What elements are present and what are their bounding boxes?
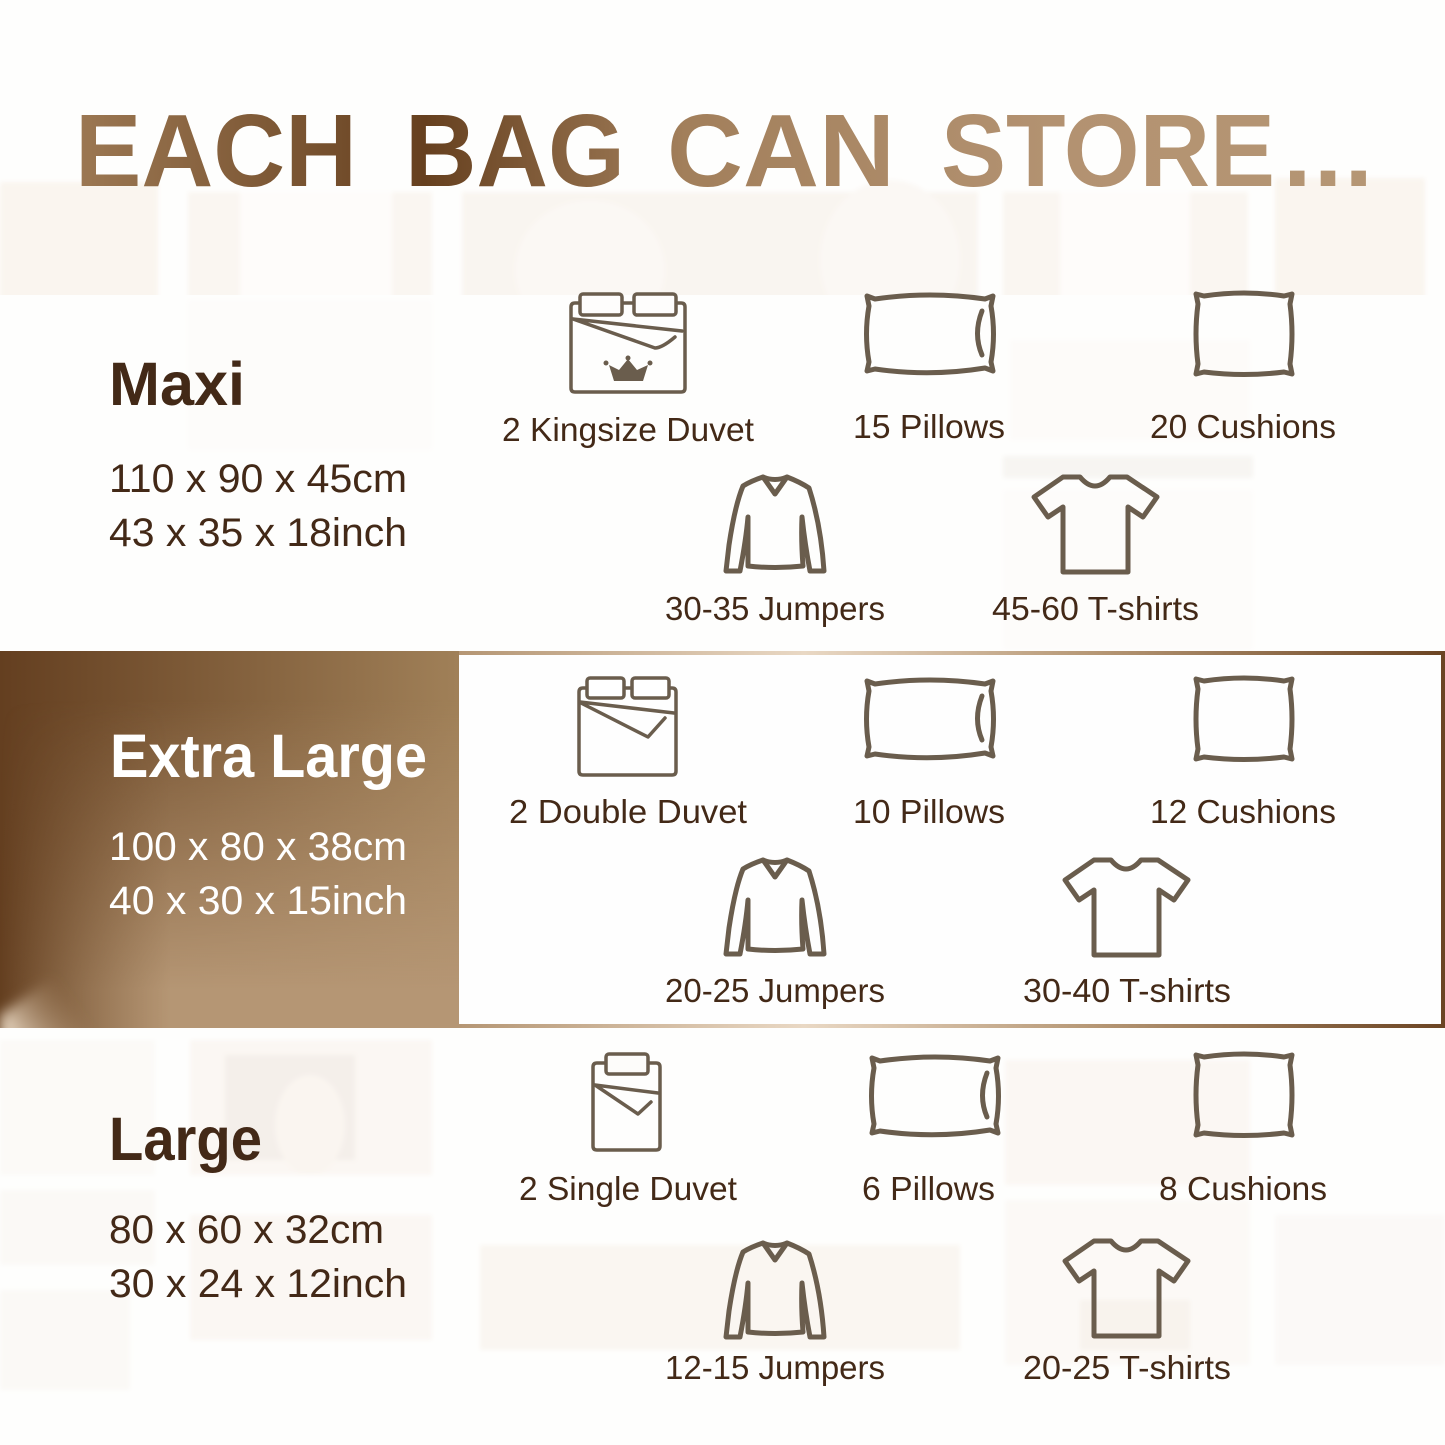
- icon: cushion: [1196, 293, 1292, 374]
- title: BAG: [405, 93, 625, 208]
- icon: jumper: [726, 477, 824, 571]
- heading: Maxi: Maxi: [109, 350, 245, 418]
- dimensions: Large: 80 x 60 x 32cm: [109, 1208, 384, 1252]
- icon: pillow: [866, 295, 994, 373]
- panel: Large size: [109, 1054, 1327, 1386]
- dimensions: Extra Large: 100 x 80 x 38cm: [109, 825, 407, 869]
- label: cushions: 20 Cushions: [1150, 408, 1336, 445]
- label: t-shirts: 45-60 T-shirts: [992, 590, 1199, 627]
- icon: kingsize bed: [571, 294, 685, 392]
- panel: Maxi size: [109, 293, 1336, 627]
- title: [75, 93, 1373, 208]
- label: jumpers: 30-35 Jumpers: [665, 590, 885, 627]
- label: double duvet: 2 Double Duvet: [509, 793, 747, 830]
- label: jumpers: 12-15 Jumpers: [665, 1349, 885, 1386]
- icon: double bed: [579, 678, 676, 775]
- label: kingsize duvet: 2 Kingsize Duvet: [502, 411, 754, 448]
- icon: single bed: [593, 1054, 660, 1150]
- dimensions: Large: 30 x 24 x 12inch: [109, 1262, 407, 1306]
- icon: jumper: [726, 1243, 824, 1337]
- title: CAN: [667, 93, 895, 208]
- label: cushions: 8 Cushions: [1159, 1170, 1327, 1207]
- icon: t-shirt: [1065, 1241, 1188, 1336]
- label: pillows: 6 Pillows: [862, 1170, 995, 1207]
- heading: Large: Large: [109, 1105, 262, 1173]
- label: t-shirts: 30-40 T-shirts: [1023, 972, 1231, 1009]
- icon: cushion: [1196, 1054, 1292, 1136]
- highlighted size block: [0, 651, 459, 1040]
- dimensions: Large: [109, 1208, 407, 1306]
- dimensions: Maxi: 110 x 90 x 45cm: [109, 457, 407, 501]
- label: t-shirts: 20-25 T-shirts: [1023, 1349, 1231, 1386]
- heading: Extra Large: Extra Large: [110, 722, 427, 790]
- panel: Extra Large size: [0, 651, 1445, 1040]
- icon: pillow: [866, 680, 994, 758]
- title: STORE: [941, 93, 1275, 208]
- label: pillows: 15 Pillows: [853, 408, 1005, 445]
- label: pillows: 10 Pillows: [853, 793, 1005, 830]
- label: cushions: 12 Cushions: [1150, 793, 1336, 830]
- icon: t-shirt: [1034, 477, 1157, 572]
- title: EACH: [75, 93, 357, 208]
- label: jumpers: 20-25 Jumpers: [665, 972, 885, 1009]
- title: ...: [1283, 93, 1373, 208]
- icon: jumper: [726, 860, 824, 954]
- dimensions: Extra Large: 40 x 30 x 15inch: [109, 879, 407, 923]
- icon: t-shirt: [1065, 860, 1188, 955]
- icon: pillow: [872, 1057, 998, 1135]
- label: single duvet: 2 Single Duvet: [519, 1170, 737, 1207]
- frame around contents: [459, 651, 1445, 1028]
- dimensions: Maxi: 43 x 35 x 18inch: [109, 511, 407, 555]
- dimensions: Extra Large: [109, 825, 407, 923]
- dimensions: Maxi: [109, 457, 407, 555]
- icon: cushion: [1196, 678, 1292, 760]
